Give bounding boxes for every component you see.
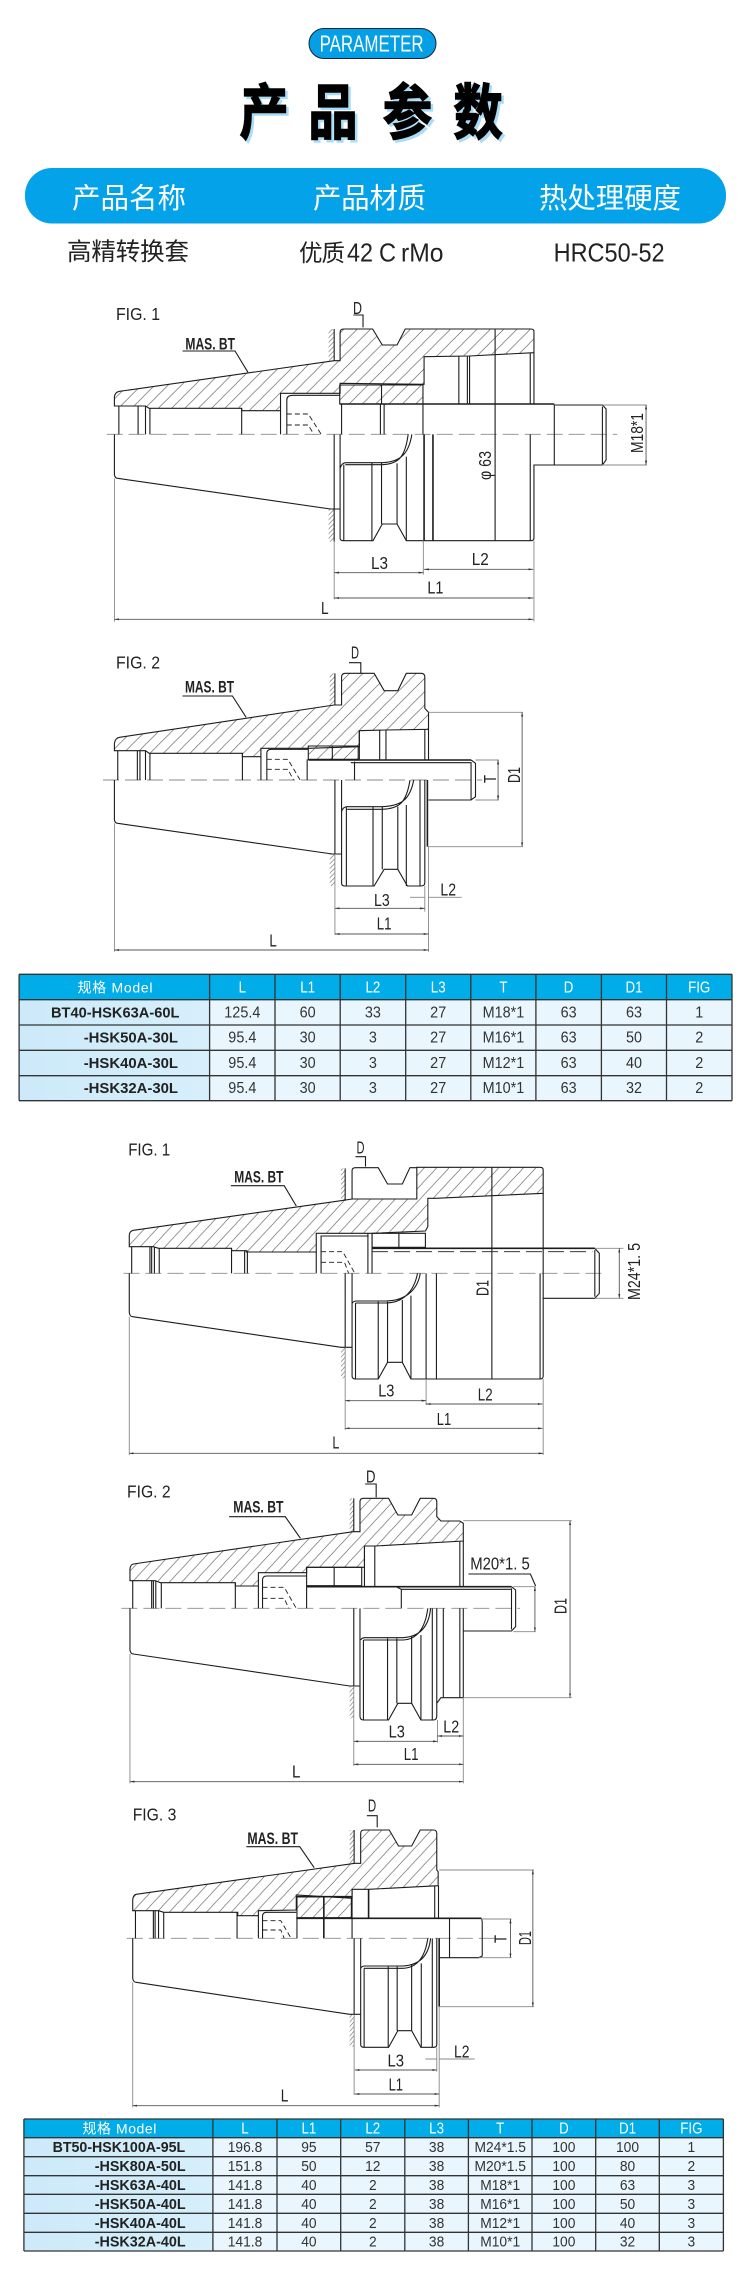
table: BT50 specifications: 38 (429, 2234, 444, 2251)
table: BT50 specifications: M20*1.5 (475, 2159, 526, 2175)
table: BT40 specifications: L1 (300, 980, 315, 997)
table: BT50 specifications: L3 (429, 2121, 444, 2138)
labels: φ 63 (475, 451, 495, 480)
table: BT40 specifications: 33 (365, 1004, 381, 1022)
table: BT50 specifications: T (496, 2121, 504, 2138)
table: BT40 specifications: 50 (626, 1029, 642, 1047)
table: BT40 specifications: M18*1 (483, 1004, 524, 1022)
labels: L1 (437, 1409, 451, 1429)
table: BT50 specifications: L (241, 2121, 249, 2138)
labels: MAS. BT (233, 1499, 284, 1517)
table: BT50 specifications: 100 (552, 2178, 575, 2194)
drawing: section view (127, 1816, 534, 2107)
table: BT40 specifications: 3 (369, 1029, 377, 1047)
labels: D1 (551, 1598, 571, 1614)
product info row (67, 238, 665, 268)
table: BT40 specifications: 30 (300, 1029, 316, 1047)
labels (127, 1466, 571, 1781)
labels: L3 (388, 2051, 404, 2071)
table: BT40 specifications: -HSK32A-30L (84, 1080, 178, 1097)
labels: T (490, 1935, 510, 1943)
table: BT40 specifications: 3 (369, 1080, 377, 1097)
labels: L3 (389, 1722, 405, 1742)
table: BT40 specifications: 27 (430, 1029, 446, 1047)
labels: L3 (374, 890, 390, 910)
labels: D1 (515, 1931, 535, 1945)
table: BT50 specifications: 规格 Model (82, 2120, 156, 2136)
table: BT40 specifications: 2 (695, 1029, 703, 1047)
table: BT50 specifications: 38 (429, 2178, 444, 2194)
labels: L1 (404, 1744, 418, 1764)
labels (116, 642, 524, 951)
table: BT40 specifications: 30 (300, 1054, 316, 1072)
table: BT40 specifications: 125.4 (224, 1004, 261, 1022)
table: BT50 specifications: 63 (620, 2178, 635, 2194)
table: BT40 specifications: 63 (561, 1029, 577, 1047)
table: BT50 specifications: 1 (688, 2140, 695, 2156)
labels: M24*1. 5 (624, 1243, 644, 1300)
labels: D1 (504, 767, 524, 783)
product info row: 42 (347, 238, 373, 268)
table: BT40 specifications: -HSK50A-30L (84, 1030, 178, 1047)
table: BT50 specifications: 38 (429, 2215, 444, 2232)
header bar (25, 168, 726, 224)
labels: D (366, 1466, 376, 1486)
labels: L2 (478, 1385, 493, 1405)
labels: L1 (427, 577, 443, 597)
table: BT40 specifications: 2 (695, 1054, 703, 1072)
table: BT50 specifications: 141.8 (228, 2178, 262, 2194)
table: BT50 specifications: 100 (552, 2196, 575, 2213)
table: BT40 specifications (19, 974, 732, 1101)
table: BT40 specifications: 2 (695, 1080, 703, 1097)
product info row: HRC50-52 (554, 238, 665, 268)
figure: BT50 FIG.2 (121, 1466, 572, 1783)
table: BT40 specifications: D (564, 980, 573, 997)
table: BT50 specifications: 3 (688, 2196, 695, 2213)
figure: BT50 FIG.1 (123, 1137, 644, 1455)
table: BT40 specifications: 60 (300, 1004, 316, 1022)
labels: L2 (454, 2041, 470, 2061)
table: BT50 specifications: 57 (365, 2140, 380, 2156)
table: BT50 specifications: M18*1 (480, 2178, 520, 2194)
table: BT40 specifications: 32 (626, 1080, 642, 1097)
table: BT50 specifications: 3 (688, 2234, 695, 2251)
table: BT50 specifications: 38 (429, 2196, 444, 2213)
table: BT40 specifications: -HSK40A-30L (84, 1055, 178, 1072)
table: BT40 specifications: M12*1 (483, 1054, 524, 1072)
table: BT50 specifications: 141.8 (228, 2215, 262, 2232)
table: BT40 specifications: 95.4 (228, 1054, 257, 1072)
table: BT40 specifications: 63 (626, 1004, 642, 1022)
labels: MAS. BT (247, 1830, 298, 1848)
labels: MAS. BT (234, 1168, 284, 1186)
table: BT50 specifications: 32 (620, 2234, 635, 2251)
labels: FIG. 1 (128, 1140, 170, 1160)
table: BT50 specifications: 2 (369, 2196, 377, 2213)
table: BT50 specifications: 100 (552, 2215, 575, 2232)
labels: D (351, 642, 359, 662)
table: BT50 specifications: -HSK32A-40L (95, 2234, 186, 2251)
drawing: section view (107, 315, 647, 622)
badge: PARAMETER (309, 28, 436, 58)
labels: T (480, 775, 500, 783)
labels: FIG. 1 (116, 304, 160, 324)
table: BT40 specifications: 30 (300, 1080, 316, 1097)
table: BT50 specifications: BT50-HSK100A-95L (53, 2139, 185, 2156)
table: BT40 specifications: 63 (561, 1080, 577, 1097)
table: BT50 specifications: 100 (552, 2234, 575, 2251)
labels: L1 (389, 2075, 403, 2095)
labels: MAS. BT (185, 335, 235, 353)
table: BT40 specifications: 95.4 (228, 1029, 257, 1047)
table: BT50 specifications: -HSK40A-40L (95, 2215, 186, 2232)
title: 产品参数 (239, 79, 503, 147)
labels: L (332, 1432, 340, 1452)
labels (116, 298, 647, 618)
drawing: section view (121, 1484, 572, 1783)
labels: FIG. 2 (127, 1481, 171, 1501)
table: BT40 specifications: 63 (561, 1054, 577, 1072)
header bar: 热处理硬度 (539, 183, 681, 215)
labels (133, 1796, 535, 2106)
table: BT50 specifications: 40 (301, 2215, 317, 2232)
table: BT40 specifications: L2 (365, 980, 380, 997)
figure: BT40 FIG.1 (107, 298, 647, 622)
table: BT50 specifications: M24*1.5 (475, 2140, 526, 2156)
table: BT50 specifications: FIG (680, 2121, 702, 2138)
labels: L (281, 2086, 289, 2106)
table: BT50 specifications: D (559, 2121, 569, 2138)
table: BT50 specifications: 40 (620, 2215, 635, 2232)
table: BT40 specifications: L (239, 980, 246, 997)
table: BT50 specifications: L1 (301, 2121, 316, 2138)
table: BT50 specifications: 100 (616, 2140, 639, 2156)
labels: M18*1 (627, 413, 647, 453)
table: BT40 specifications: 1 (695, 1004, 703, 1022)
table: BT50 specifications: 141.8 (228, 2196, 262, 2213)
product info row: C (379, 238, 396, 268)
labels: L2 (440, 879, 456, 899)
table: BT40 specifications: 27 (430, 1004, 446, 1022)
badge: PARAMETER: PARAMETER (320, 30, 424, 56)
table: BT40 specifications: 63 (561, 1004, 577, 1022)
labels: D (356, 1137, 364, 1157)
table: BT50 specifications: 151.8 (228, 2159, 262, 2175)
table: BT50 specifications: 40 (301, 2178, 317, 2194)
labels: FIG. 2 (116, 652, 160, 672)
figure: BT50 FIG.3 (127, 1796, 535, 2107)
table: BT40 specifications: 95.4 (228, 1080, 257, 1097)
table: BT50 specifications: 196.8 (228, 2140, 262, 2156)
table: BT40 specifications: M16*1 (483, 1029, 524, 1047)
table: BT50 specifications: 2 (688, 2159, 695, 2175)
header bar: 产品名称 (72, 183, 186, 215)
table: BT50 specifications: 3 (688, 2215, 695, 2232)
table: BT40 specifications: 27 (430, 1054, 446, 1072)
table: BT50 specifications (24, 2119, 723, 2251)
labels: L3 (371, 553, 388, 573)
table: BT50 specifications: 40 (301, 2234, 317, 2251)
table: BT50 specifications: 2 (369, 2178, 377, 2194)
table: BT50 specifications: M12*1 (480, 2215, 520, 2232)
table: BT40 specifications: BT40-HSK63A-60L (51, 1004, 179, 1021)
header bar: 产品材质 (313, 183, 426, 215)
table: BT50 specifications: D1 (619, 2121, 636, 2138)
labels: M20*1. 5 (470, 1553, 530, 1573)
table: BT50 specifications: 50 (301, 2159, 317, 2175)
labels (128, 1137, 644, 1452)
table: BT50 specifications: 141.8 (228, 2234, 262, 2251)
table: BT40 specifications: 规格 Model (78, 980, 152, 996)
labels: L1 (377, 913, 392, 933)
table: BT50 specifications: -HSK63A-40L (95, 2177, 186, 2194)
labels: MAS. BT (185, 679, 234, 697)
table: BT50 specifications: L2 (365, 2121, 380, 2138)
drawing: section view (123, 1157, 623, 1455)
labels: D (353, 298, 362, 318)
table: BT40 specifications: T (499, 980, 508, 997)
table: BT50 specifications: 2 (369, 2215, 377, 2232)
labels: L3 (378, 1381, 394, 1401)
table: BT50 specifications: 3 (688, 2178, 695, 2194)
table: BT40 specifications: 27 (430, 1080, 446, 1097)
table: BT50 specifications: M16*1 (480, 2196, 520, 2213)
table: BT50 specifications: M10*1 (480, 2234, 520, 2251)
labels: L (321, 598, 329, 618)
labels: L (269, 931, 277, 951)
product info row: 高精转换套 (67, 238, 189, 266)
table: BT40 specifications: FIG (688, 980, 710, 997)
table: BT50 specifications: 38 (429, 2140, 444, 2156)
table: BT50 specifications: 2 (369, 2234, 377, 2251)
table: BT50 specifications: -HSK50A-40L (95, 2196, 186, 2213)
table: BT50 specifications: 38 (429, 2159, 444, 2175)
table: BT40 specifications: 3 (369, 1054, 377, 1072)
labels: L2 (443, 1717, 459, 1737)
product info row: 优质 (299, 240, 345, 266)
table: BT50 specifications: 95 (301, 2140, 317, 2156)
labels: FIG. 3 (133, 1805, 176, 1825)
title: 产品参数 (242, 82, 505, 150)
labels: D (368, 1796, 376, 1816)
labels: L2 (472, 549, 489, 569)
figure: BT40 FIG.2 (103, 642, 524, 952)
table: BT50 specifications: 12 (365, 2159, 380, 2175)
table: BT50 specifications: -HSK80A-50L (95, 2158, 186, 2175)
table: BT50 specifications: 50 (620, 2196, 635, 2213)
table: BT50 specifications: 100 (552, 2140, 575, 2156)
table: BT40 specifications: 40 (626, 1054, 642, 1072)
drawing: section view (103, 663, 523, 952)
table: BT40 specifications: D1 (625, 980, 643, 997)
product info row: rMo (401, 238, 444, 268)
table: BT50 specifications: 100 (552, 2159, 575, 2175)
labels: L (292, 1761, 301, 1781)
table: BT40 specifications: L3 (431, 980, 446, 997)
table: BT40 specifications: M10*1 (483, 1080, 524, 1097)
table: BT50 specifications: 80 (620, 2159, 635, 2175)
table: BT50 specifications: 40 (301, 2196, 317, 2213)
labels: D1 (472, 1280, 492, 1296)
